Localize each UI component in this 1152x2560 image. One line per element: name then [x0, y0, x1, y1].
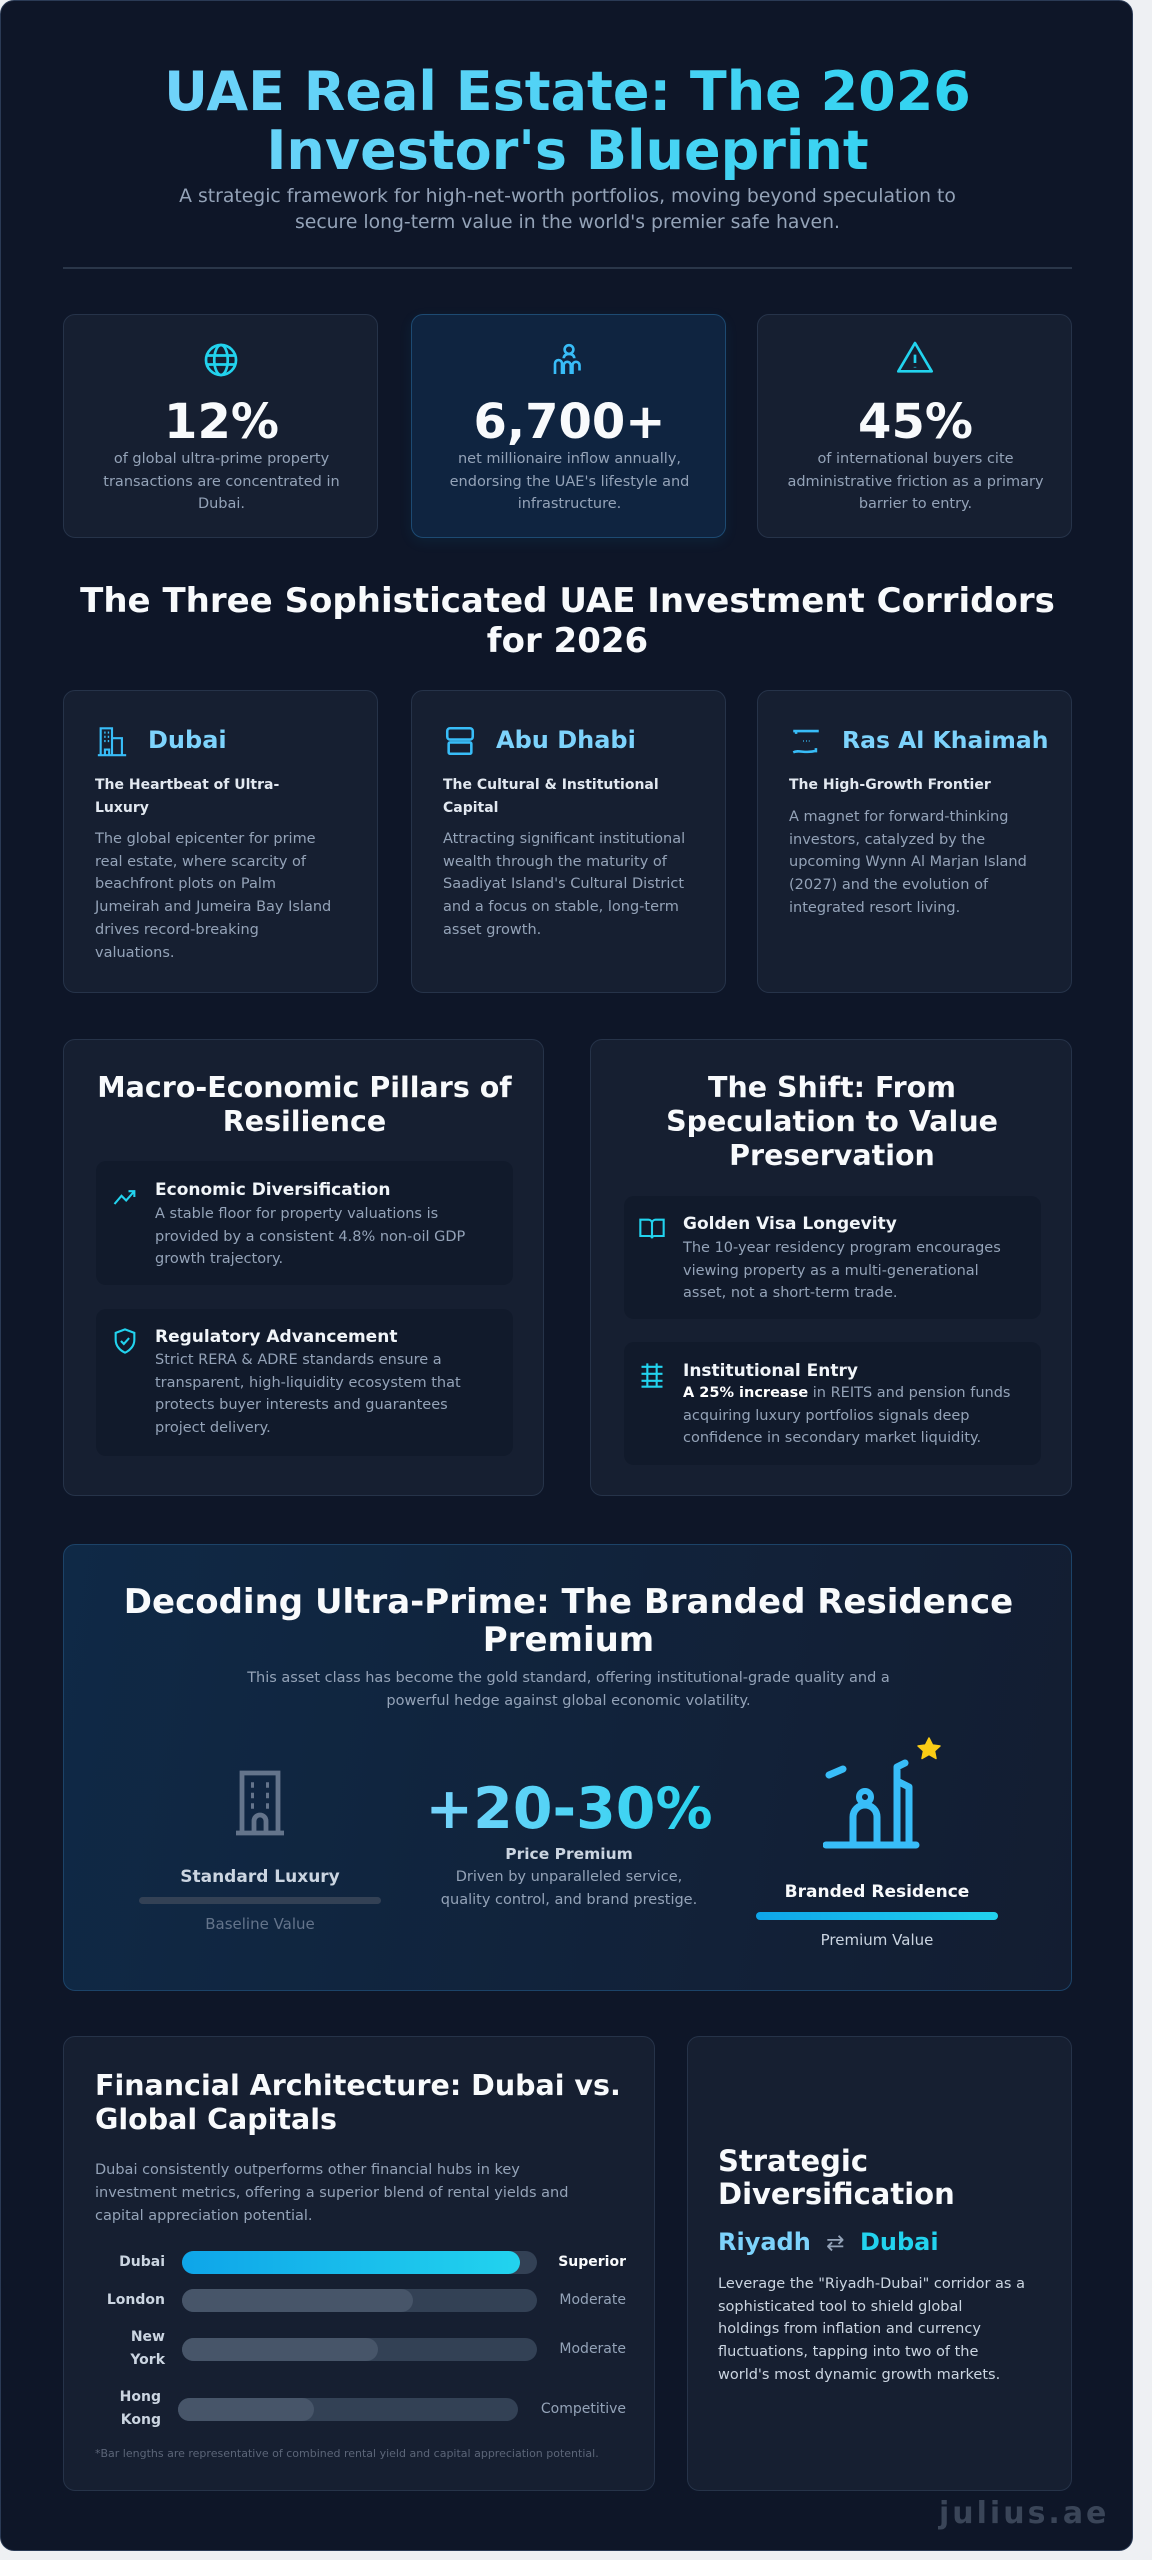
description: transactions are concentrated in	[103, 474, 340, 490]
description: administrative friction as a primary	[787, 474, 1044, 490]
name: Dubai	[148, 726, 227, 754]
subtitle	[95, 777, 279, 816]
description: Dubai consistently outperforms other financial hubs in key	[95, 2162, 520, 2178]
corridor card: Ras Al Khaimah	[757, 690, 1072, 993]
body: Attracting significant institutional	[443, 831, 685, 847]
bar chart: Superior	[558, 2254, 626, 2270]
heading	[718, 2144, 955, 2211]
heading: Speculation to Value	[666, 1105, 998, 1138]
body: Saadiyat Island's Cultural District	[443, 876, 684, 892]
body: beachfront plots on Palm	[95, 876, 276, 892]
description	[787, 451, 1044, 512]
heading: Decoding Ultra-Prime: The Branded Residence	[124, 1582, 1013, 1622]
description: of global ultra-prime property	[114, 451, 329, 467]
body: (2027) and the evolution of	[789, 877, 988, 893]
item: golden visa: The 10-year residency program encourages	[683, 1240, 1001, 1256]
stat card: 6,700+	[411, 314, 726, 538]
body	[789, 809, 1027, 916]
body: fluctuations, tapping into two of the	[718, 2344, 978, 2360]
heading	[97, 1071, 512, 1138]
body	[443, 831, 685, 938]
bar chart: Moderate	[559, 2292, 626, 2308]
column: standard luxury: Standard Luxury	[180, 1867, 340, 1887]
subtitle: The High-Growth Frontier	[789, 777, 991, 793]
panel: branded residence premium	[63, 1544, 1072, 1991]
bar: New York: York	[130, 2352, 165, 2368]
item: regulatory advancement: Regulatory Advancement	[155, 1327, 397, 1347]
subtitle: Luxury	[95, 800, 149, 816]
bar: Dubai: Dubai	[119, 2254, 165, 2270]
body	[94, 831, 331, 961]
column: branded residence	[756, 1737, 998, 1949]
column: standard luxury: Baseline Value	[205, 1915, 315, 1933]
icon: globe	[204, 344, 238, 376]
icon: wave	[792, 730, 819, 754]
item: golden visa	[624, 1196, 1041, 1319]
icon: building	[236, 1770, 284, 1836]
body: asset growth.	[443, 922, 541, 938]
heading: Financial Architecture: Dubai vs.	[95, 2069, 621, 2102]
description: net millionaire inflow annually,	[458, 451, 681, 467]
description	[95, 2162, 568, 2224]
body: wealth through the maturity of	[443, 854, 667, 870]
body: sophisticated tool to shield global	[718, 2299, 962, 2315]
number: 45%	[858, 394, 973, 450]
corridor label: Riyadh ⇄ Dubai	[718, 2228, 939, 2256]
bar: Hong Kong: Kong	[121, 2412, 161, 2428]
heading: Preservation	[729, 1139, 935, 1172]
icon: people	[554, 344, 581, 374]
heading: Global Capitals	[95, 2103, 337, 2136]
body: investors, catalyzed by the	[789, 832, 985, 848]
panel: the shift	[590, 1039, 1072, 1496]
description: infrastructure.	[518, 496, 621, 512]
column: price premium: quality control, and brand prestige.	[441, 1892, 697, 1908]
number: 6,700+	[473, 394, 666, 450]
subtitle: Capital	[443, 800, 498, 816]
section heading: corridors	[80, 581, 1055, 661]
column: price premium	[425, 1776, 713, 1908]
icon: city	[98, 727, 126, 756]
item: golden visa: asset, not a short-term trade.	[683, 1285, 897, 1301]
body	[718, 2276, 1025, 2383]
heading: Macro-Economic Pillars of	[97, 1071, 512, 1104]
title: UAE Real Estate: The 2026	[164, 60, 971, 123]
panel: strategic diversification	[687, 2036, 1072, 2491]
heading: Resilience	[223, 1105, 386, 1138]
description	[450, 451, 689, 512]
heading: Diversification	[718, 2177, 955, 2211]
subtitle: The Heartbeat of Ultra-	[95, 777, 279, 793]
column: branded residence: Premium Value	[821, 1931, 933, 1949]
item: golden visa: Golden Visa Longevity	[683, 1214, 897, 1234]
subheading	[247, 1670, 890, 1708]
icon: warning	[897, 342, 934, 373]
subtitle: A strategic framework for high-net-worth portfolios, moving beyond speculation to	[179, 186, 956, 207]
icon: branded building with star	[823, 1737, 941, 1848]
item: regulatory advancement	[96, 1309, 513, 1456]
heading	[124, 1582, 1013, 1660]
body: A magnet for forward-thinking	[789, 809, 1008, 825]
section heading: corridors: for 2026	[487, 621, 648, 661]
body: upcoming Wynn Al Marjan Island	[789, 854, 1027, 870]
description: Dubai.	[198, 496, 245, 512]
bar: Hong Kong	[120, 2389, 161, 2428]
bar: London: London	[107, 2292, 165, 2308]
heading: Premium	[483, 1620, 654, 1660]
item: regulatory advancement: protects buyer interests and guarantees	[155, 1397, 448, 1413]
body: world's most dynamic growth markets.	[718, 2367, 1000, 2383]
heading: The Shift: From	[708, 1071, 956, 1104]
body: holdings from inflation and currency	[718, 2321, 981, 2337]
item: institutional entry	[624, 1342, 1041, 1465]
item: economic diversification	[96, 1161, 513, 1285]
item: institutional entry: A 25% increase in REITS and pension funds	[683, 1385, 1010, 1401]
column: standard luxury	[139, 1770, 381, 1933]
icon: grid building	[642, 1363, 662, 1388]
description: barrier to entry.	[859, 496, 972, 512]
bar chart: Competitive	[541, 2401, 626, 2417]
description	[103, 451, 340, 512]
subtitle	[179, 186, 956, 233]
corridor card: Abu Dhabi	[411, 690, 726, 993]
icon: shield	[114, 1328, 136, 1354]
item: regulatory advancement: project delivery.	[155, 1420, 271, 1436]
name: Abu Dhabi	[496, 726, 636, 754]
description: investment metrics, offering a superior blend of rental yields and	[95, 2185, 568, 2201]
bar chart: Moderate	[559, 2341, 626, 2357]
heading: Strategic	[718, 2144, 868, 2178]
column: price premium: Price Premium	[505, 1845, 633, 1863]
column: branded residence: Branded Residence	[785, 1882, 969, 1902]
subheading: powerful hedge against global economic volatility.	[386, 1692, 751, 1708]
column: price premium: Driven by unparalleled service,	[456, 1869, 682, 1885]
icon: trend	[114, 1190, 136, 1205]
body: valuations.	[95, 945, 175, 961]
panel: macro-economic pillars	[63, 1039, 544, 1496]
item: institutional entry: Institutional Entry	[683, 1361, 858, 1381]
item: regulatory advancement: transparent, high-liquidity ecosystem that	[155, 1375, 461, 1391]
subtitle	[443, 777, 659, 816]
description: of international buyers cite	[817, 451, 1014, 467]
item: economic diversification: provided by a consistent 4.8% non-oil GDP	[155, 1229, 465, 1245]
bar: Hong Kong: Hong	[120, 2389, 161, 2405]
number: 12%	[164, 394, 279, 450]
body: Jumeirah and Jumeira Bay Island	[95, 899, 331, 915]
name: Ras Al Khaimah	[842, 726, 1048, 754]
bar: New York: New	[131, 2329, 165, 2345]
icon: book	[639, 1218, 665, 1238]
body: real estate, where scarcity of	[95, 854, 306, 870]
item: golden visa: viewing property as a multi-generational	[683, 1263, 979, 1279]
subtitle: secure long-term value in the world's premier safe haven.	[295, 212, 840, 233]
item: economic diversification: growth trajectory.	[155, 1251, 283, 1267]
column: price premium: +20-30%	[425, 1776, 713, 1842]
bar: New York	[130, 2329, 166, 2368]
subheading: This asset class has become the gold standard, offering institutional-grade quality and a	[247, 1670, 890, 1686]
subtitle: The Cultural & Institutional	[443, 777, 659, 793]
item: institutional entry: acquiring luxury portfolios signals deep	[683, 1408, 970, 1424]
body: and a focus on stable, long-term	[443, 899, 679, 915]
heading	[95, 2069, 621, 2136]
body: Leverage the "Riyadh-Dubai" corridor as a	[718, 2276, 1025, 2292]
body: drives record-breaking	[95, 922, 259, 938]
title: Investor's Blueprint	[266, 119, 869, 182]
body: integrated resort living.	[789, 900, 960, 916]
section heading: corridors: The Three Sophisticated UAE Investment Corridors	[80, 581, 1055, 621]
bar chart	[107, 2251, 626, 2428]
item: economic diversification: Economic Diversification	[155, 1180, 390, 1200]
description: endorsing the UAE's lifestyle and	[450, 474, 689, 490]
panel: financial architecture	[63, 2036, 655, 2491]
title	[1, 62, 1134, 180]
body: The global epicenter for prime	[95, 831, 316, 847]
corridor card: Dubai	[63, 690, 378, 993]
item: institutional entry: confidence in secondary market liquidity.	[683, 1430, 981, 1446]
description: capital appreciation potential.	[95, 2208, 313, 2224]
stat card: 12%	[63, 314, 378, 538]
icon: archive	[446, 727, 474, 755]
watermark: julius.ae	[939, 2496, 1109, 2531]
item: economic diversification: A stable floor for property valuations is	[155, 1206, 438, 1222]
heading	[666, 1071, 998, 1172]
footnote: *Bar lengths are representative of combined rental yield and capital appreciation potential.	[95, 2447, 599, 2460]
stat card: 45%	[757, 314, 1072, 538]
item: regulatory advancement: Strict RERA & ADRE standards ensure a	[155, 1352, 442, 1368]
